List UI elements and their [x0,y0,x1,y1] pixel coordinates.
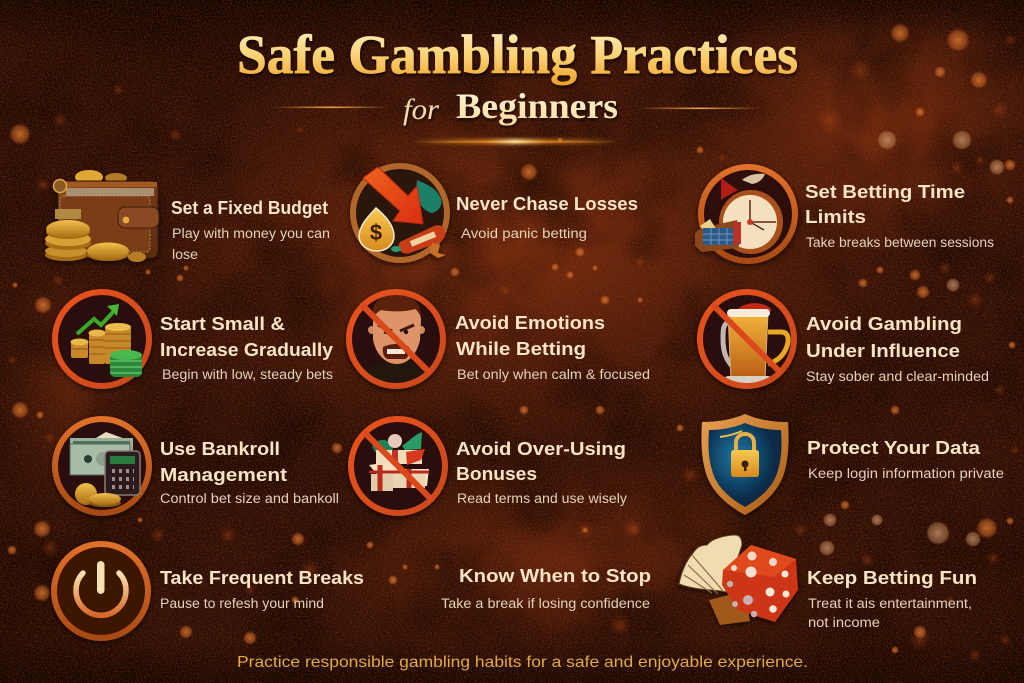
heading: Avoid Emotions [455,312,605,333]
description: Stay sober and clear-minded [806,369,989,384]
description: not income [808,615,880,630]
heading: Take Frequent Breaks [160,567,364,588]
item: Protect Your Data [701,414,1004,515]
icon: cards and red die [679,535,798,625]
icon: stopwatch and chips [695,167,795,261]
item: Keep Betting Fun [679,535,977,630]
item: Use Bankroll Management [55,419,339,513]
heading [455,312,605,359]
heading: While Betting [456,338,586,359]
description [172,226,330,262]
item: Avoid Gambling Under Influence [700,292,989,386]
description: Control bet size and bankoll [160,491,339,506]
heading: Keep Betting Fun [807,567,977,588]
heading: Avoid Over-Using [456,438,626,459]
heading: Start Small & [160,313,285,334]
heading [805,181,965,227]
icon: coin stacks with rising arrow [55,292,149,386]
heading [806,313,962,361]
icon: falling arrow and money bag [353,166,447,260]
description: Take a break if losing confidence [441,596,650,611]
description: Begin with low, steady bets [162,367,333,382]
item: Set a Fixed Budget [45,170,330,262]
heading: Avoid Gambling [806,313,962,334]
item: Set Betting Time Limits [695,167,994,261]
icon: angry face with no sign [349,292,443,386]
description: Play with money you can [172,226,330,241]
heading [160,438,287,485]
title: Safe Gambling Practices [237,24,798,85]
description: Avoid panic betting [461,226,587,241]
subtitle: for [403,93,439,126]
heading: Set a Fixed Budget [171,197,328,218]
title flourish lines [272,106,762,144]
description: Keep login information private [808,466,1004,481]
icon: banknotes, calculator and coins [55,419,149,513]
description: lose [172,247,198,262]
footer tagline: Practice responsible gambling habits for a safe and enjoyable experience. [237,654,808,671]
heading: Know When to Stop [459,565,651,586]
item: Start Small and Increase Gradually [55,292,334,386]
heading: Limits [805,206,866,227]
icon: gift boxes with no sign [351,419,445,513]
heading: Under Influence [806,340,960,361]
heading: Management [160,464,287,485]
heading [160,313,334,360]
icon: power button [54,544,148,638]
item: Never Chase Losses [353,166,638,260]
item: Avoid Emotions While Betting [349,292,650,386]
description: Pause to refesh your mind [160,596,324,611]
icon: beer mug with no sign [700,292,794,386]
description: Bet only when calm & focused [457,367,650,382]
heading: Bonuses [456,463,537,484]
icon: falling arrow and money bag: $ [370,220,382,245]
description: Read terms and use wisely [457,491,627,506]
item: Take Frequent Breaks [54,544,364,638]
heading: Set Betting Time [805,181,965,202]
heading: Never Chase Losses [456,193,638,214]
description: Take breaks between sessions [806,235,994,250]
description [808,596,972,630]
description: Treat it ais entertainment, [808,596,972,611]
heading: Use Bankroll [160,438,280,459]
heading: Increase Gradually [160,339,334,360]
subtitle: Beginners [456,86,618,126]
item: Know When to Stop [441,565,651,611]
icon: shield with padlock [701,414,789,515]
heading [456,438,626,484]
heading: Protect Your Data [807,437,981,458]
icon: wallet with coins [45,170,159,262]
item: Avoid Over-Using Bonuses [351,419,627,513]
